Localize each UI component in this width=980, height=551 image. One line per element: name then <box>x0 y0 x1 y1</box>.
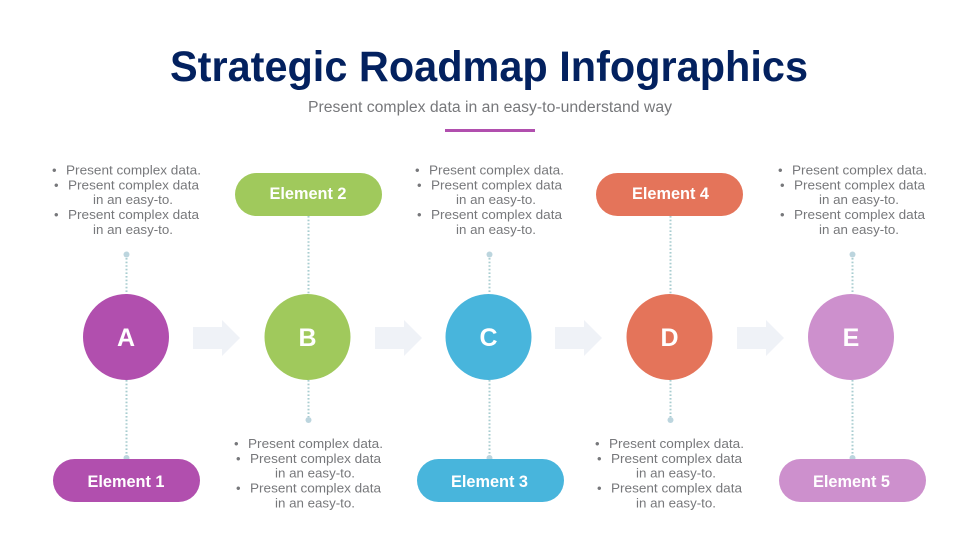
bullets C: in an easy-to. <box>456 222 536 237</box>
letter D: D <box>660 324 679 352</box>
circle A <box>83 294 169 380</box>
bullets B <box>234 436 383 510</box>
bullets C: Present complex data <box>431 178 563 192</box>
bullets E <box>778 162 927 237</box>
connector C top <box>486 252 492 294</box>
connector D top <box>670 216 672 294</box>
bullets A: in an easy-to. <box>93 222 173 237</box>
bullets A: • <box>52 162 57 178</box>
connector A bottom <box>124 380 130 461</box>
bullets C: in an easy-to. <box>456 192 536 207</box>
pill: Element 4 <box>596 173 743 216</box>
bullets E: in an easy-to. <box>819 222 899 237</box>
bullets C: • <box>415 162 420 178</box>
bullets D <box>595 436 744 510</box>
bullets B: Present complex data <box>250 480 382 496</box>
pill: Element 1 <box>53 459 200 502</box>
connector B bottom <box>306 380 312 423</box>
bullets E: • <box>780 178 785 192</box>
letter E: E <box>843 324 859 352</box>
bullets D: Present complex data. <box>609 436 744 451</box>
connector D bottom <box>668 380 674 423</box>
pill label: Element 5: Element 5 <box>813 472 890 491</box>
bullets B: Present complex data <box>250 451 382 466</box>
bullets A: Present complex data <box>68 178 200 192</box>
bullets D: Present complex data <box>611 480 743 496</box>
bullets B: • <box>236 451 241 466</box>
pill: Element 2 <box>235 173 382 216</box>
bullets A: • <box>54 178 59 192</box>
circle E <box>808 294 894 380</box>
bullets C: • <box>417 207 422 222</box>
arrow 3 <box>555 320 602 356</box>
arrow 2 <box>375 320 422 356</box>
bullets A: • <box>54 207 59 222</box>
pill label: Element 3: Element 3 <box>451 472 528 491</box>
bullets A: Present complex data <box>68 207 200 222</box>
title: Strategic Roadmap Infographics <box>170 43 808 91</box>
bullets A: in an easy-to. <box>93 192 173 207</box>
connector E bottom <box>850 380 856 461</box>
letter B: B <box>298 324 317 352</box>
bullets E: • <box>780 207 785 222</box>
pill label: Element 4: Element 4 <box>632 184 710 203</box>
bullets B: Present complex data. <box>248 436 383 451</box>
pill: Element 5 <box>779 459 926 502</box>
bullets D: in an easy-to. <box>636 496 716 510</box>
connector E top <box>850 252 856 294</box>
bullets D: • <box>595 436 600 451</box>
title underline <box>445 129 535 132</box>
bullets D: in an easy-to. <box>636 466 716 480</box>
subtitle: Present complex data in an easy-to-understand way <box>308 99 672 116</box>
pill: Element 3 <box>417 459 564 502</box>
pill label: Element 2: Element 2 <box>270 184 346 203</box>
step A <box>52 162 201 502</box>
circle D <box>626 294 712 380</box>
connector C bottom <box>486 380 492 461</box>
step E <box>778 162 927 502</box>
bullets E: Present complex data <box>794 178 926 192</box>
connector A top <box>124 252 130 294</box>
bullets D: Present complex data <box>611 451 743 466</box>
step D <box>595 173 744 510</box>
bullets D: • <box>597 451 602 466</box>
pill label: Element 1: Element 1 <box>88 472 164 491</box>
bullets A <box>52 162 201 237</box>
connector B top <box>308 216 310 294</box>
bullets B: • <box>234 436 239 451</box>
bullets B: in an easy-to. <box>275 496 355 510</box>
bullets C <box>415 162 564 237</box>
bullets E: • <box>778 162 783 178</box>
bullets E: in an easy-to. <box>819 192 899 207</box>
arrow 1 <box>193 320 240 356</box>
circle B <box>264 294 350 380</box>
bullets B: in an easy-to. <box>275 466 355 480</box>
bullets C: Present complex data. <box>429 162 564 178</box>
bullets E: Present complex data. <box>792 162 927 178</box>
bullets A: Present complex data. <box>66 162 201 178</box>
letter A: A <box>117 324 135 352</box>
bullets E: Present complex data <box>794 207 926 222</box>
bullets B: • <box>236 480 241 496</box>
bullets C: Present complex data <box>431 207 563 222</box>
letter C: C <box>479 324 498 352</box>
arrow 4 <box>737 320 784 356</box>
step B <box>234 173 383 510</box>
bullets D: • <box>597 480 602 496</box>
step C <box>415 162 564 502</box>
circle C <box>446 294 532 380</box>
bullets C: • <box>417 178 422 192</box>
